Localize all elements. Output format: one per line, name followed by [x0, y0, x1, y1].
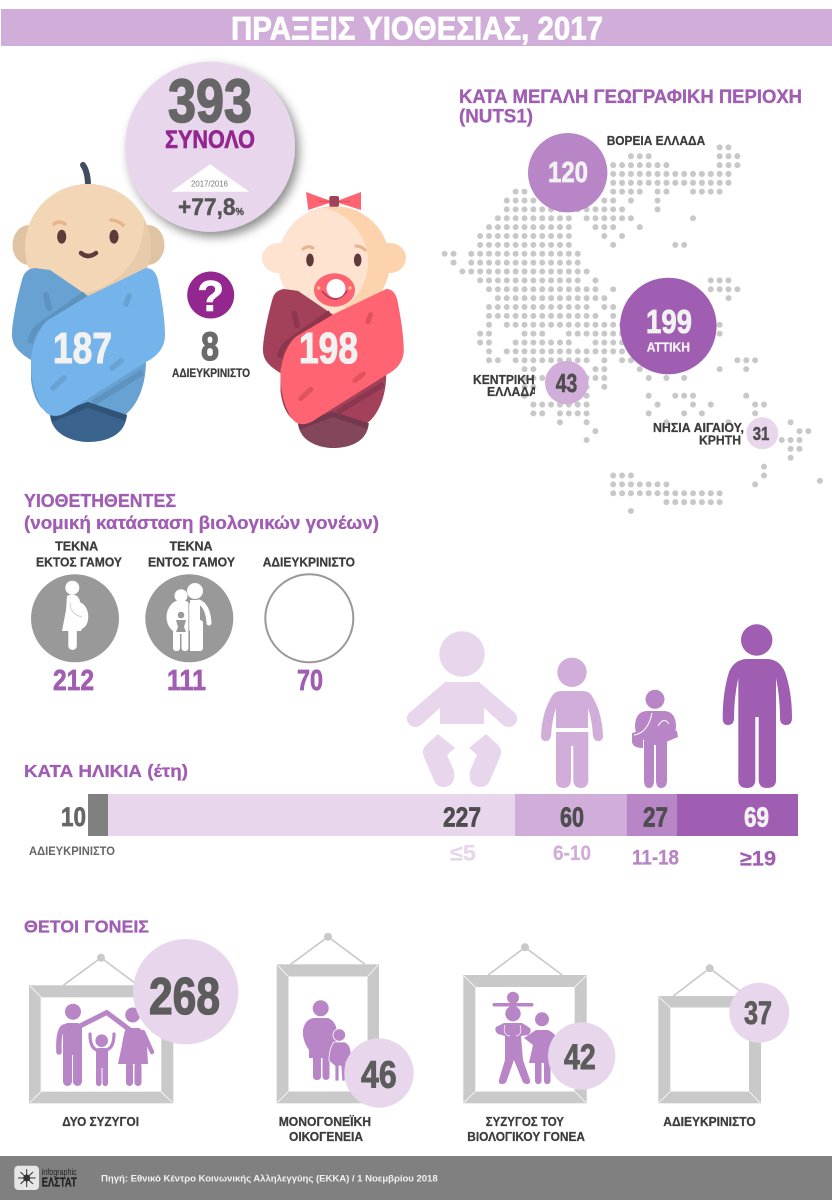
frame: single parent family: 46 [361, 1055, 397, 1097]
heading: by region: ΚΑΤΑ ΜΕΓΑΛΗ ΓΕΩΓΡΑΦΙΚΗ ΠΕΡΙΟΧΗ [459, 86, 802, 108]
region: northern Greece: 120 [548, 157, 588, 189]
item: children in wedlock: 111 [167, 665, 206, 697]
total circle [125, 62, 295, 232]
region: northern Greece [528, 133, 705, 212]
region: central Greece: ΕΛΛΑΔΑ [487, 384, 539, 399]
frame: unspecified: ΑΔΙΕΥΚΡΙΝΙΣΤΟ [663, 1115, 756, 1129]
heading: by age: ΚΑΤΑ ΗΛΙΚΙΑ (έτη) [24, 761, 188, 781]
baby girl illustration: 198 [299, 324, 358, 373]
frame: single parent family: ΜΟΝΟΓΟΝΕΪΚΗ [279, 1114, 371, 1129]
footer bar: ΕΛΣΤΑΤ [42, 1175, 77, 1190]
unspecified sex marker: ? [197, 272, 224, 321]
heading: adoptees [24, 491, 379, 533]
frame: two spouses [29, 939, 238, 1129]
item: children in wedlock: ΕΝΤΟΣ ΓΑΜΟΥ [148, 556, 236, 570]
frame: unspecified [658, 964, 789, 1129]
region: Attica: ΑΤΤΙΚΗ [647, 341, 690, 355]
heading: by region: (NUTS1) [459, 106, 533, 128]
frame: spouse of biological parent: ΒΙΟΛΟΓΙΚΟΥ ΓΟΝΕΑ [467, 1130, 585, 1144]
baby boy illustration: 187 [53, 324, 112, 373]
total circle: 393 [168, 67, 252, 135]
stacked age bar: 27 [643, 802, 668, 833]
stacked age bar: ΑΔΙΕΥΚΡΙΝΙΣΤΟ [29, 844, 115, 858]
stacked age bar: 11-18 [632, 846, 679, 869]
item: children out of wedlock [31, 540, 123, 697]
baby girl illustration [258, 192, 406, 448]
frame: two spouses: ΔΥΟ ΣΥΖΥΓΟΙ [62, 1115, 139, 1129]
frame: spouse of biological parent: ΣΥΖΥΓΟΣ ΤΟΥ [486, 1115, 565, 1129]
title banner: ΠΡΑΞΕΙΣ ΥΙΟΘΕΣΙΑΣ, 2017 [231, 10, 603, 46]
dot map of Greece [445, 147, 820, 511]
frame: spouse of biological parent: 42 [564, 1038, 596, 1077]
frame: unspecified: 37 [744, 995, 772, 1031]
frame: two spouses: 268 [149, 968, 220, 1026]
total circle: +77,8% [178, 194, 244, 221]
item: children in wedlock: ΤΕΚΝΑ [169, 540, 213, 554]
icon: infant [407, 631, 517, 787]
frame: single parent family: ΟΙΚΟΓΕΝΕΙΑ [289, 1130, 363, 1144]
region: central Greece [473, 361, 588, 404]
footer bar: Πηγή: Εθνικό Κέντρο Κοινωνικής Αλληλεγγύης (ΕΚΚΑ) / 1 Νοεμβρίου 2018 [101, 1174, 438, 1185]
region: central Greece: ΚΕΝΤΡΙΚΗ, [473, 372, 538, 387]
item: children in wedlock [145, 540, 236, 697]
item: unspecified legal status: 70 [297, 665, 323, 697]
heading: adoptees: (νομική κατάσταση βιολογικών γονέων) [24, 513, 379, 533]
frame: spouse of biological parent [463, 943, 615, 1144]
title banner [1, 9, 832, 46]
total circle: ΣΥΝΟΛΟ [165, 126, 255, 154]
heading: adoptive parents: ΘΕΤΟΙ ΓΟΝΕΙΣ [24, 917, 149, 937]
icon: child [541, 658, 603, 788]
item: unspecified legal status: ΑΔΙΕΥΚΡΙΝΙΣΤΟ [263, 556, 355, 570]
stacked age bar: 10 [61, 802, 86, 832]
icon: adult [723, 624, 792, 788]
item: children out of wedlock: ΤΕΚΝΑ [55, 540, 98, 554]
region: Aegean islands and Crete: ΚΡΗΤΗ [699, 433, 741, 448]
item: unspecified legal status [263, 556, 355, 697]
region: Attica: 199 [646, 303, 692, 340]
stacked age bar: ≥19 [740, 848, 776, 871]
item: children out of wedlock: 212 [53, 665, 94, 697]
total circle: 2017/2016 [191, 179, 228, 189]
item: children out of wedlock: ΕΚΤΟΣ ΓΑΜΟΥ [36, 556, 123, 570]
baby boy illustration [12, 162, 165, 442]
region: central Greece: 43 [556, 368, 577, 398]
stacked age bar: ≤5 [450, 841, 476, 866]
frame: single parent family [277, 933, 414, 1144]
footer bar [0, 1156, 832, 1200]
stacked age bar: 60 [560, 802, 584, 833]
region: northern Greece: ΒΟΡΕΙΑ ΕΛΛΑΔΑ [607, 134, 705, 148]
region: Aegean islands and Crete: ΝΗΣΙΑ ΑΙΓΑΙΟΥ, [653, 420, 744, 435]
unspecified sex marker: ΑΔΙΕΥΚΡΙΝΙΣΤΟ [172, 368, 250, 380]
region: Aegean islands and Crete: 31 [753, 423, 769, 444]
icon: teenager with school bag [632, 690, 678, 788]
heading: adoptees: ΥΙΟΘΕΤΗΘΕΝΤΕΣ [24, 491, 176, 511]
region: Aegean islands and Crete [653, 417, 778, 449]
footer bar: infographic [42, 1167, 77, 1178]
stacked age bar: 69 [744, 802, 769, 833]
stacked age bar [29, 794, 798, 871]
stacked age bar: 227 [443, 802, 481, 833]
stacked age bar: 6-10 [553, 842, 591, 865]
region: Attica [620, 278, 717, 374]
unspecified sex marker: 8 [201, 325, 219, 369]
unspecified sex marker [172, 272, 250, 380]
heading: by region [459, 86, 802, 128]
